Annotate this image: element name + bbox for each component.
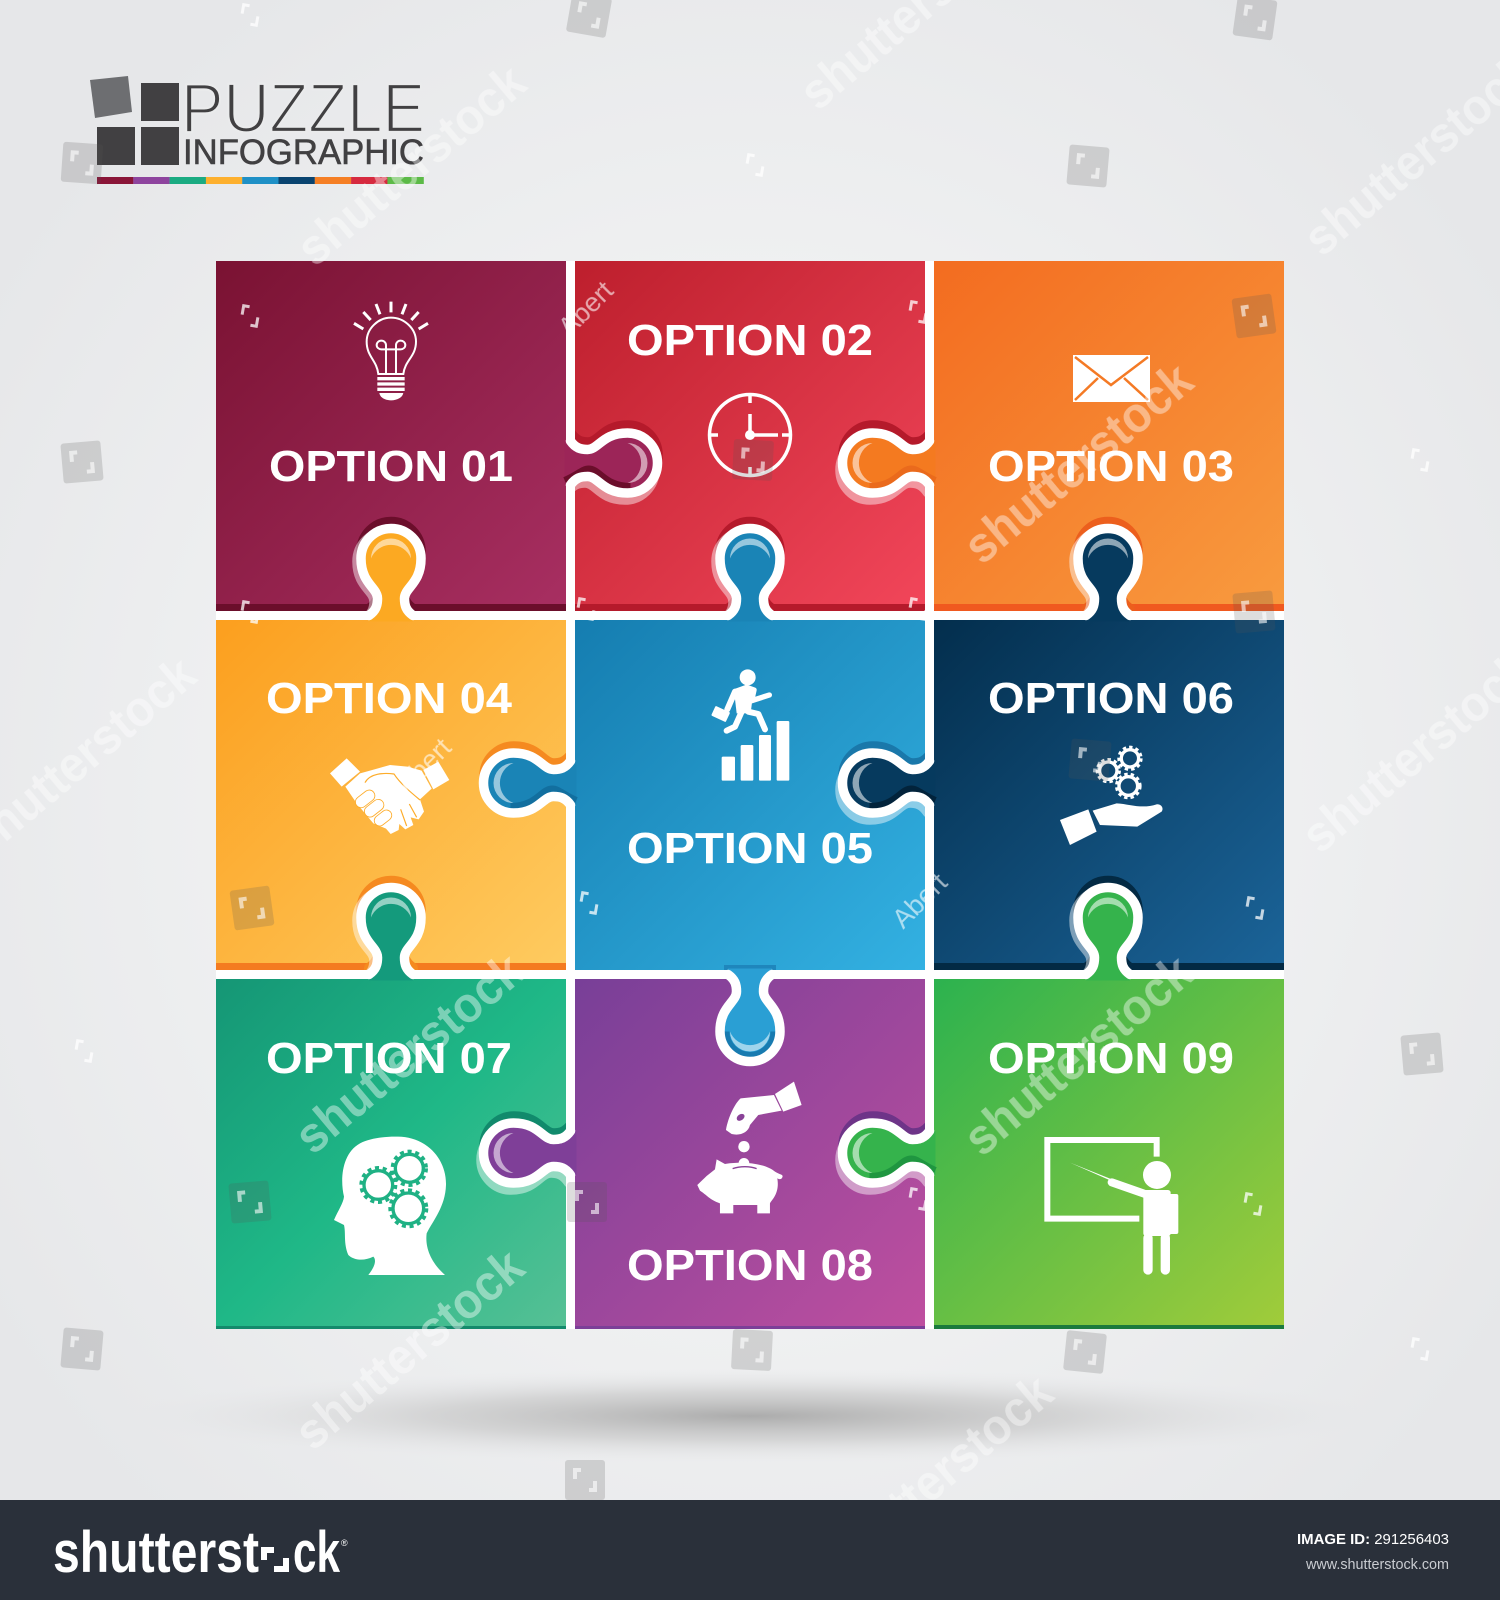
panel: option 04 xyxy=(216,620,566,970)
connector: option 06 tab into option 03 xyxy=(1074,522,1138,632)
logo: puzzle infographic xyxy=(90,69,425,184)
watermark: stock wordmarks: shutterstock xyxy=(284,941,534,1164)
watermark: stock wordmarks: shutterstock xyxy=(284,1237,534,1460)
connector: option 05 tab into option 08 xyxy=(720,968,780,1062)
connector: option 03 tab into option 02 xyxy=(840,425,944,500)
panel: option 06 xyxy=(934,620,1284,970)
footer image id: IMAGE ID: 291256403 xyxy=(1297,1531,1449,1548)
panel: option 02 xyxy=(575,261,925,611)
watermark: stock wordmarks: shutterstock xyxy=(286,53,536,276)
icon: light bulb xyxy=(354,302,428,400)
icon: runner on bar chart xyxy=(711,669,789,781)
icon: teacher at board xyxy=(1047,1140,1178,1275)
footer registered mark: ® xyxy=(341,1538,348,1548)
connector: option 08 tab into option 07 xyxy=(481,1116,585,1190)
connector: option 06 tab into option 05 xyxy=(840,746,944,820)
connector: option 09 tab into option 06 xyxy=(1074,880,1138,992)
connector: option 07 tab into option 04 xyxy=(357,880,421,992)
watermark: stock wordmarks: shutterstock xyxy=(953,351,1203,574)
label: option 08: OPTION 08 xyxy=(627,1241,873,1290)
watermark: author name: Abert xyxy=(552,275,619,342)
floor shadow under puzzle xyxy=(110,1368,1390,1464)
panel: option 08 xyxy=(575,979,925,1329)
logo word: PUZZLE: PUZZLE xyxy=(181,69,425,147)
footer url: www.shutterstock.com xyxy=(1305,1556,1449,1573)
watermark: stock wordmarks: shutterstock xyxy=(813,1363,1063,1586)
label: option 02: OPTION 02 xyxy=(627,316,873,365)
watermark: stock wordmarks: shutterstock xyxy=(953,943,1203,1166)
icon: clock xyxy=(709,394,791,476)
connector: option 05 tab into option 02 xyxy=(716,522,780,632)
footer brand wordmark: ck xyxy=(293,1520,341,1585)
label: option 01: OPTION 01 xyxy=(269,442,513,491)
label: option 09: OPTION 09 xyxy=(988,1034,1234,1083)
label: option 07: OPTION 07 xyxy=(266,1034,512,1083)
watermark: author name: Abert xyxy=(390,732,457,799)
footer bar xyxy=(0,1500,1500,1600)
icon: envelope xyxy=(1073,355,1150,402)
connector: option 04 tab into option 01 xyxy=(357,522,421,632)
icon: handshake xyxy=(330,758,449,834)
panel: option 05 xyxy=(575,620,925,970)
label: option 03: OPTION 03 xyxy=(988,442,1234,491)
panel: option 07 xyxy=(216,979,566,1329)
connector: option 05 tab into option 04 xyxy=(484,746,585,813)
icon: piggy bank with coin xyxy=(697,1082,802,1213)
panel: option 09 xyxy=(934,979,1284,1329)
panel: option 03 xyxy=(934,261,1284,611)
watermark: author name xyxy=(390,275,953,934)
footer brand wordmark: shutterst xyxy=(53,1520,259,1585)
logo word: INFOGRAPHIC: INFOGRAPHIC xyxy=(183,133,424,172)
connector: option 09 tab into option 08 xyxy=(840,1116,944,1190)
watermark: author name: Abert xyxy=(886,867,953,934)
icon: hand holding gears xyxy=(1060,747,1163,845)
label: option 04: OPTION 04 xyxy=(266,674,513,723)
logo colour bar xyxy=(97,177,424,184)
label: option 05: OPTION 05 xyxy=(627,824,873,873)
panel: option 01 xyxy=(216,261,566,611)
icon: head with gears xyxy=(334,1137,446,1275)
label: option 06: OPTION 06 xyxy=(988,674,1234,723)
logo squares xyxy=(90,76,179,165)
white gaps between pieces xyxy=(216,261,1284,1329)
connector: option 01 tab into option 02 xyxy=(554,425,658,500)
